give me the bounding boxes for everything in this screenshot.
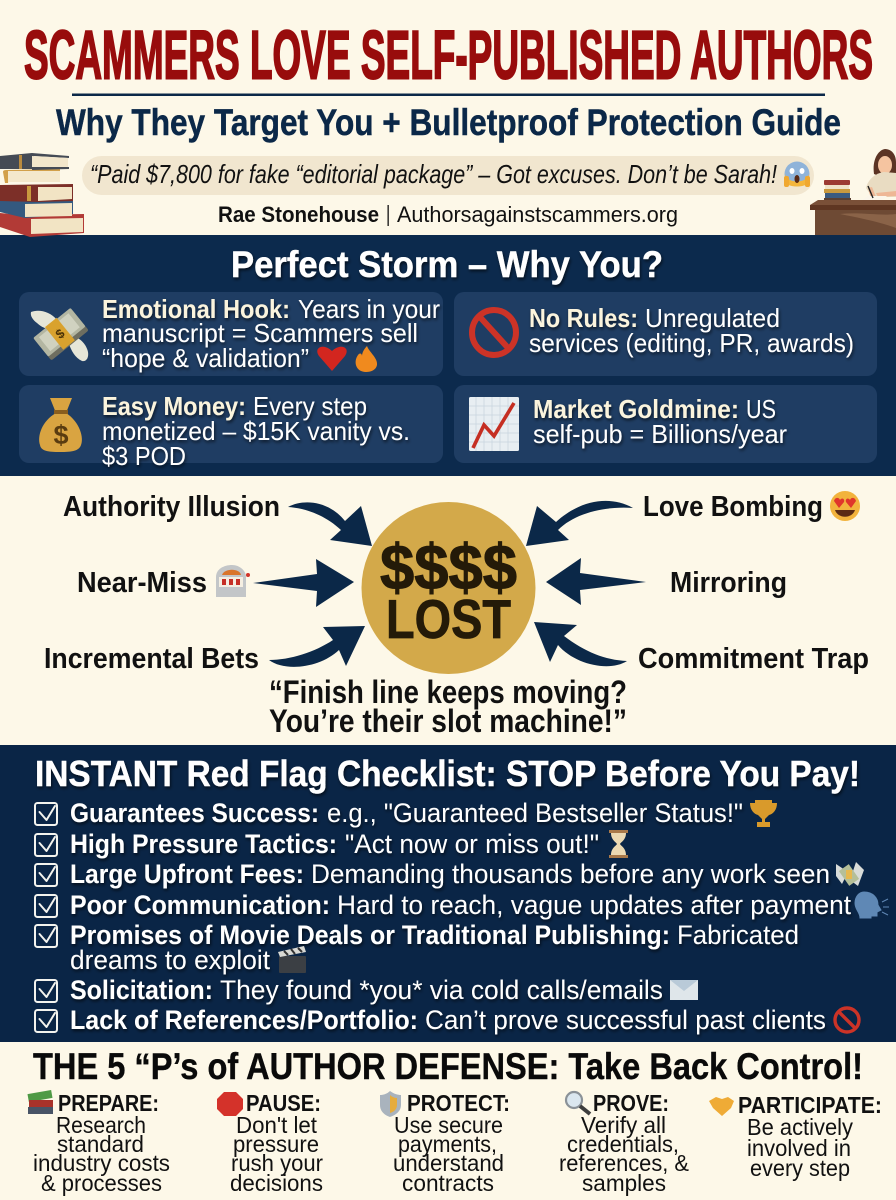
icon: money bag: $: [53, 420, 69, 450]
label: mirroring: Mirroring: [670, 567, 787, 599]
icon: stop sign: [217, 1092, 243, 1116]
checklist item: solicitation: Solicitation:: [70, 975, 213, 1005]
diagram: tactics converging on money lost: [44, 491, 869, 739]
icon: flame: [356, 346, 377, 372]
checklist item: promises of movie deals: Fabricated: [677, 920, 799, 950]
column: pause: [217, 1090, 323, 1196]
card: easy money: monetized – $15K vanity vs.: [102, 416, 410, 446]
icon: clapper board: [278, 946, 306, 973]
card: no rules: [454, 292, 877, 376]
column: prove: samples: [582, 1170, 666, 1196]
arrow: love bombing: [526, 501, 633, 546]
icon: magnifying glass: [566, 1092, 590, 1114]
card: emotional hook: manuscript = Scammers sell: [102, 318, 418, 348]
checklist item: poor communication: Poor Communication:: [70, 890, 330, 920]
icon: money with wings: $: [52, 325, 68, 342]
card: emotional hook: “hope & validation”: [102, 343, 309, 373]
icon: handshake: [709, 1097, 734, 1116]
column: protect: payments,: [398, 1131, 497, 1157]
checklist item: promises of movie deals: Promises of Movie Deals or Traditional Publishing:: [70, 920, 670, 950]
icon: trophy: [750, 800, 777, 827]
checklist item: poor communication: [35, 890, 889, 920]
checklist item: solicitation: [35, 975, 698, 1005]
column: participate: PARTICIPATE:: [738, 1092, 882, 1118]
column: prove: PROVE:: [593, 1090, 669, 1116]
coin: $$$$ lost: [362, 502, 536, 674]
panel: perfect storm: [0, 235, 896, 476]
checklist item: poor communication: Hard to reach, vague updates after payment: [337, 890, 851, 920]
card: market goldmine: Market Goldmine:: [533, 394, 739, 424]
column: prepare: & processes: [41, 1170, 162, 1196]
checklist item: large upfront fees: [35, 859, 864, 889]
coin: $$$$ lost: $$$$: [380, 531, 517, 603]
checklist item: lack of references: Can’t prove successful past clients: [425, 1005, 826, 1035]
icon: books: [27, 1090, 53, 1114]
panel: red flag checklist: [0, 745, 896, 1042]
column: protect: PROTECT:: [407, 1090, 510, 1116]
column: pause: Don't let: [236, 1112, 318, 1138]
illustration: stack of books: [0, 153, 84, 237]
checklist item: guarantees success: [35, 798, 777, 828]
column: protect: Use secure: [394, 1112, 503, 1138]
checklist item: high pressure tactics: [35, 829, 628, 859]
checklist item: solicitation: They found *you* via cold calls/emails: [220, 975, 663, 1005]
label: love bombing: Love Bombing: [643, 491, 823, 523]
card: no rules: services (editing, PR, awards): [529, 328, 854, 358]
icon: heart: [317, 347, 347, 371]
card: market goldmine: [454, 385, 877, 463]
icon: shield: [380, 1091, 401, 1117]
checklist item: guarantees success: e.g., "Guaranteed Bestseller Status!": [327, 798, 743, 828]
icon: prohibited: [835, 1008, 859, 1032]
checklist item: large upfront fees: Demanding thousands before any work seen: [311, 859, 830, 889]
label: near-miss: Near-Miss: [77, 567, 207, 599]
column: prepare: Research: [56, 1112, 146, 1138]
card: easy money: Easy Money:: [102, 391, 246, 421]
card: no rules: Unregulated: [645, 303, 780, 333]
column: pause: PAUSE:: [246, 1090, 321, 1116]
column: participate: [709, 1092, 882, 1181]
column: pause: decisions: [230, 1170, 323, 1196]
icon: speaking head: [855, 892, 889, 918]
icon: money with wings: [836, 862, 864, 886]
quote: slot machine: “Finish line keeps moving?: [269, 674, 627, 710]
label: commitment trap: Commitment Trap: [638, 643, 869, 675]
column: pause: rush your: [231, 1150, 323, 1176]
icon: money bag: [39, 398, 82, 452]
icon: money with wings: [31, 307, 89, 361]
card: easy money: [19, 385, 443, 471]
arrow: authority illusion: [288, 502, 372, 546]
arrow: mirroring: [546, 558, 646, 605]
card: emotional hook: [19, 292, 443, 376]
column: participate: involved in: [747, 1135, 851, 1161]
arrow: near-miss: [253, 559, 354, 607]
column: participate: every step: [750, 1155, 850, 1181]
heading: perfect storm: Perfect Storm – Why You?: [231, 244, 663, 285]
column: prove: references, &: [559, 1150, 689, 1176]
arrow: incremental bets: [269, 626, 365, 667]
checklist item: high pressure tactics: High Pressure Tactics:: [70, 829, 337, 859]
card: easy money: Every step: [253, 391, 367, 421]
column: prepare: standard: [57, 1131, 144, 1157]
column: protect: [380, 1090, 510, 1196]
label: authority illusion: Authority Illusion: [63, 491, 280, 523]
column: prepare: [27, 1090, 170, 1196]
card: market goldmine: US: [746, 394, 776, 424]
label: incremental bets: Incremental Bets: [44, 643, 259, 675]
column: prove: Verify all: [581, 1112, 666, 1138]
icon: screaming face: [784, 162, 810, 187]
card: emotional hook: Years in your: [298, 294, 440, 324]
checklist item: promises of movie deals: [35, 920, 799, 975]
checklist item: lack of references: Lack of References/Portfolio:: [70, 1005, 418, 1035]
column: prove: credentials,: [567, 1131, 679, 1157]
icon: envelope: [670, 980, 698, 1000]
card: no rules: No Rules:: [529, 303, 638, 333]
author credit: [218, 202, 678, 227]
column: protect: understand: [393, 1150, 504, 1176]
checklist item: lack of references: [35, 1005, 859, 1035]
card: emotional hook: Emotional Hook:: [102, 294, 290, 324]
column: participate: Be actively: [747, 1114, 853, 1140]
checklist item: high pressure tactics: "Act now or miss out!": [345, 829, 599, 859]
icon: prohibited: [472, 310, 516, 355]
author credit: Rae Stonehouse: [218, 202, 379, 227]
icon: hourglass: [609, 830, 628, 858]
column: protect: contracts: [402, 1170, 494, 1196]
quote: slot machine: [269, 674, 627, 739]
column: prepare: PREPARE:: [58, 1090, 159, 1116]
author credit: Authorsagainstscammers.org: [397, 202, 678, 227]
checklist item: guarantees success: Guarantees Success:: [70, 798, 319, 828]
card: market goldmine: self-pub = Billions/year: [533, 419, 787, 449]
checklist item: promises of movie deals: dreams to exploit: [70, 945, 270, 975]
arrow: commitment trap: [534, 622, 627, 666]
checklist item: large upfront fees: Large Upfront Fees:: [70, 859, 304, 889]
coin: $$$$ lost: LOST: [386, 588, 511, 650]
icon: rising chart: [469, 397, 519, 451]
quote: slot machine: You’re their slot machine!”: [269, 703, 627, 739]
column: prove: [559, 1090, 689, 1196]
illustration: woman writing at desk: [810, 149, 896, 235]
column: prepare: industry costs: [33, 1150, 170, 1176]
column: pause: pressure: [233, 1131, 319, 1157]
card: easy money: $3 POD: [102, 441, 186, 471]
